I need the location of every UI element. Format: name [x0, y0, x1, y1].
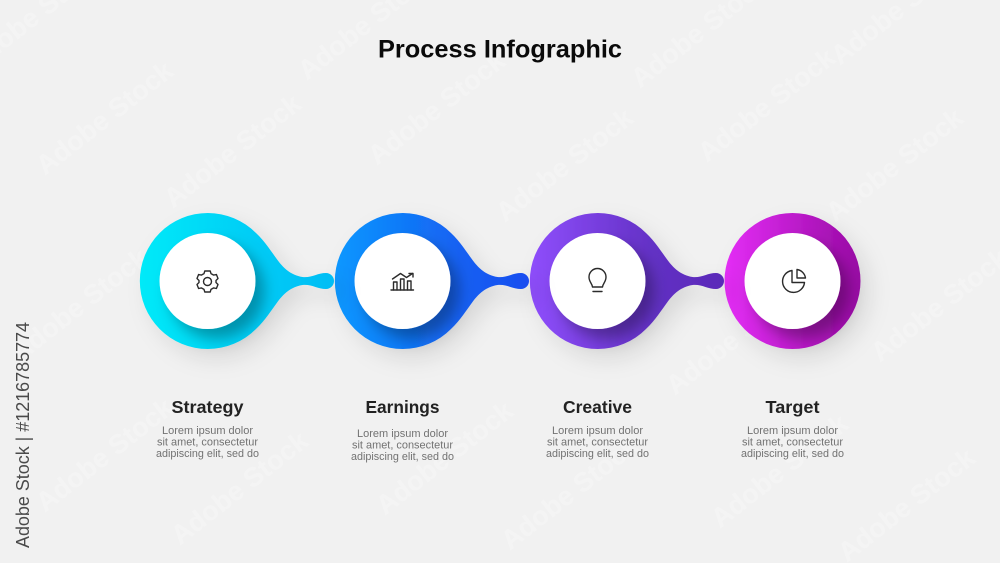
step text: strategy: Strategy — [172, 397, 244, 417]
step text: earnings: adipiscing elit, sed do — [351, 451, 454, 463]
watermark pattern: Adobe Stock — [30, 392, 179, 518]
watermark pattern: Adobe Stock — [490, 102, 639, 228]
step text: earnings: Lorem ipsum dolor — [357, 428, 448, 440]
watermark pattern: Adobe Stock — [30, 55, 179, 181]
watermark pattern: Adobe Stock — [5, 242, 154, 368]
step text: earnings: sit amet, consectetur — [352, 440, 453, 452]
step text: creative: Creative — [563, 397, 632, 417]
step text: strategy: Lorem ipsum dolor — [162, 425, 253, 437]
watermark pattern: Adobe Stock — [165, 425, 314, 551]
step text: target: Lorem ipsum dolor — [747, 425, 838, 437]
watermark pattern: Adobe Stock — [362, 45, 511, 171]
step text: creative: sit amet, consectetur — [547, 436, 648, 448]
watermark pattern: Adobe Stock — [495, 430, 644, 556]
process step 4: target marker — [724, 213, 860, 349]
watermark pattern: Adobe Stock — [158, 88, 307, 214]
step text: strategy — [156, 397, 259, 460]
watermark pattern: Adobe Stock — [705, 408, 854, 534]
process step 1: strategy marker — [140, 213, 334, 349]
step text: target: Target — [766, 397, 820, 417]
icon: pie chart — [783, 270, 806, 292]
step text: creative: Lorem ipsum dolor — [552, 425, 643, 437]
icon: bar chart with arrow — [391, 274, 414, 290]
watermark pattern: Adobe Stock — [820, 102, 969, 228]
step text: creative: adipiscing elit, sed do — [546, 448, 649, 460]
watermark pattern: Adobe Stock — [660, 275, 809, 401]
step text: strategy: adipiscing elit, sed do — [156, 448, 259, 460]
step text: earnings — [351, 397, 454, 463]
process step 3: creative marker — [530, 213, 724, 349]
step text: target: adipiscing elit, sed do — [741, 448, 844, 460]
step text: creative — [546, 397, 649, 460]
icon: light bulb — [589, 268, 606, 292]
watermark pattern: Adobe Stock — [370, 395, 519, 521]
process step 2: earnings marker — [335, 213, 529, 349]
step text: strategy: sit amet, consectetur — [157, 436, 258, 448]
step text: target — [741, 397, 844, 460]
icon: gear — [197, 271, 218, 292]
step text: earnings: Earnings — [366, 397, 440, 417]
title: Process Infographic — [378, 36, 622, 64]
step text: target: sit amet, consectetur — [742, 436, 843, 448]
stock side label: Adobe Stock | #1216785774 — [13, 322, 33, 548]
watermark pattern: Adobe Stock — [692, 42, 841, 168]
